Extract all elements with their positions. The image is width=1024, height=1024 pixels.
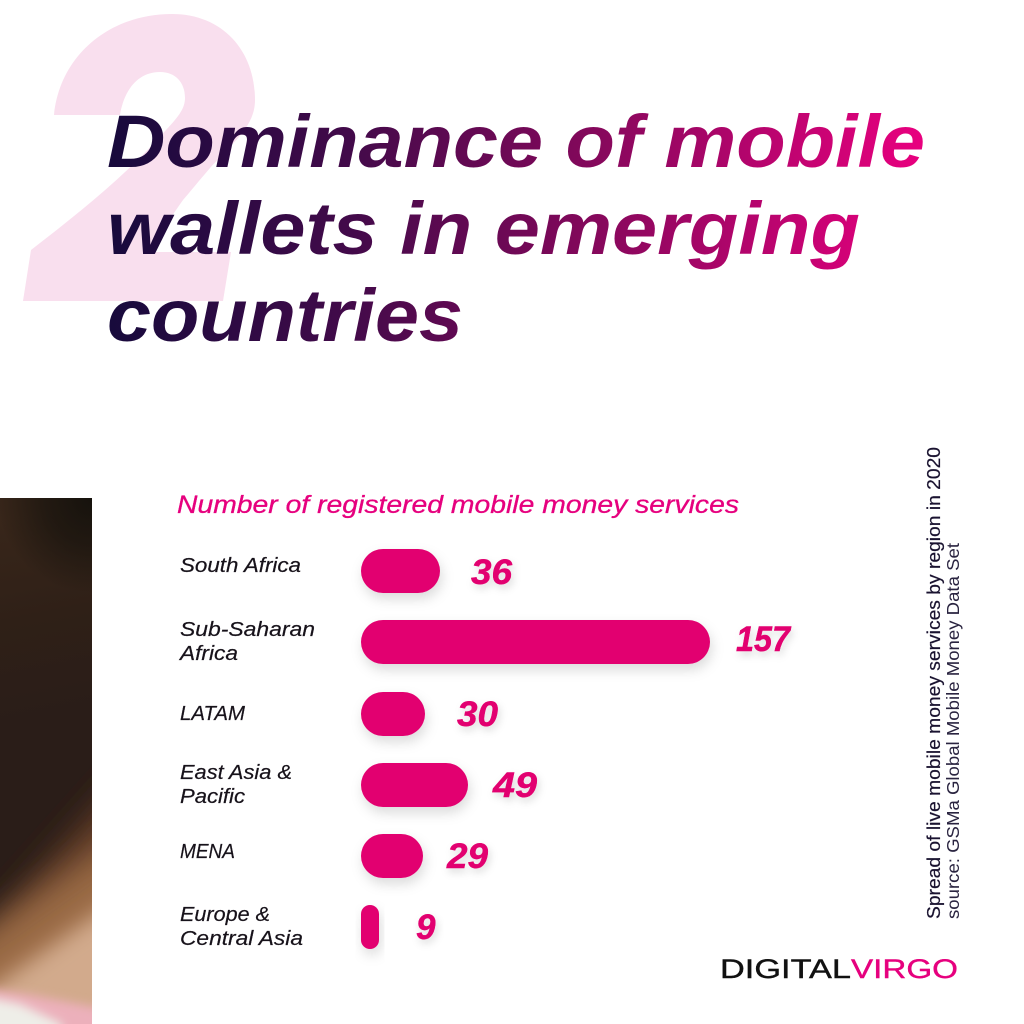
row: East Asia & Pacific: 49 <box>492 766 538 805</box>
row: Sub-Saharan Africa <box>178 618 791 665</box>
title: Dominance of mobile <box>107 100 925 183</box>
row: East Asia & Pacific: Pacific <box>180 785 246 808</box>
row: Europe & Central Asia: 9 <box>416 908 436 947</box>
logo: Digital Virgo: DIGITAL <box>720 954 851 984</box>
title: wallets in emerging <box>107 187 860 270</box>
big pale number 2 <box>23 14 255 301</box>
logo: Digital Virgo <box>720 954 958 984</box>
row: Europe & Central Asia <box>180 903 436 950</box>
title <box>107 100 925 357</box>
row: LATAM <box>180 692 499 736</box>
row: LATAM: 30 <box>457 695 499 734</box>
row: South Africa <box>180 549 513 593</box>
row: South Africa: South Africa <box>180 554 301 577</box>
row: East Asia & Pacific <box>180 761 538 808</box>
title: countries <box>107 274 463 357</box>
row: East Asia & Pacific: East Asia & <box>180 761 292 784</box>
row: MENA: MENA <box>180 840 235 863</box>
row: MENA <box>180 834 489 878</box>
row: Sub-Saharan Africa: Africa <box>178 642 238 665</box>
row: Sub-Saharan Africa: 157 <box>736 620 791 659</box>
row: Europe & Central Asia: Central Asia <box>180 927 303 950</box>
row: South Africa: 36 <box>471 553 513 592</box>
row: MENA: 29 <box>446 837 489 876</box>
source note, rotated: source: GSMa Global Mobile Money Data Set <box>943 543 963 919</box>
chart heading: Number of registered mobile money services <box>177 491 739 519</box>
row: LATAM: LATAM <box>180 702 246 725</box>
row: Europe & Central Asia: Europe & <box>180 903 270 926</box>
source note, rotated: Spread of live mobile money services by region in 2020 <box>924 447 944 919</box>
source note, rotated <box>924 447 963 919</box>
photo strip <box>0 498 92 1024</box>
row: Sub-Saharan Africa: Sub-Saharan <box>180 618 315 641</box>
logo: Digital Virgo: VIRGO <box>851 954 958 984</box>
bar chart <box>178 549 791 950</box>
